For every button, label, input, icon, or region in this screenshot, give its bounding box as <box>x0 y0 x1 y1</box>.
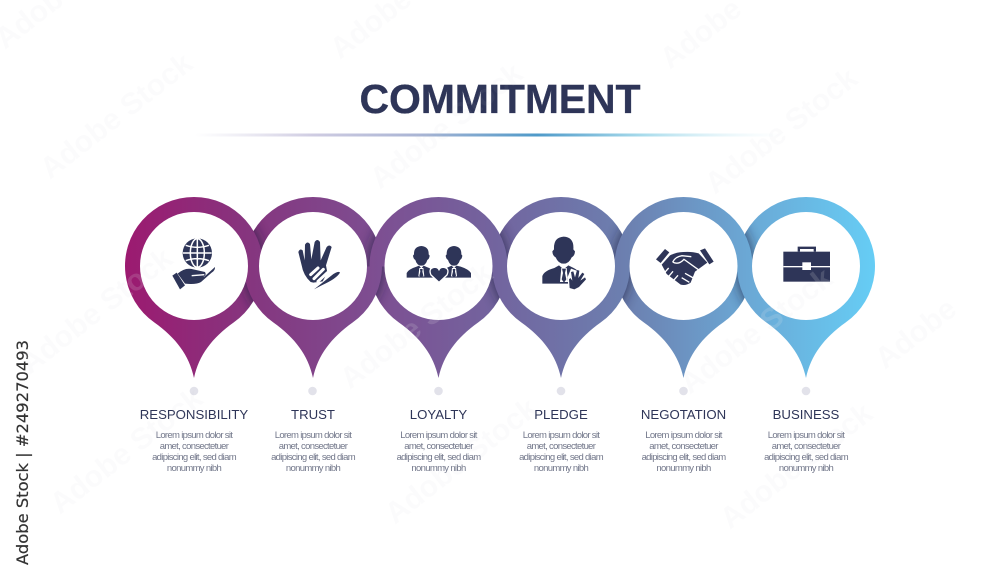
icon: two men and heart <box>407 246 471 282</box>
description: adipiscing elit, sed diam <box>519 452 604 463</box>
description: amet, consectetuer <box>160 441 229 452</box>
watermark: Adobe <box>869 292 963 376</box>
step 5: negotation <box>630 212 738 474</box>
description: amet, consectetuer <box>649 441 718 452</box>
label: LOYALTY <box>410 407 467 422</box>
watermark: Adobe Stock <box>674 261 839 401</box>
watermark: Adobe Stock <box>14 241 179 381</box>
description: nonummy nibh <box>656 463 711 474</box>
description: amet, consectetuer <box>772 441 841 452</box>
dot <box>679 387 688 395</box>
description: Lorem ipsum dolor sit <box>768 430 845 441</box>
dot <box>308 387 317 395</box>
watermark: Adobe Stock <box>334 256 499 396</box>
watermark: Adobe Stock <box>674 261 839 401</box>
description: nonummy nibh <box>286 463 340 474</box>
description: adipiscing elit, sed diam <box>397 452 481 463</box>
icon: man raising hand <box>542 237 587 291</box>
description: amet, consectetuer <box>404 441 473 452</box>
title: COMMITMENT <box>360 76 640 122</box>
label: RESPONSIBILITY <box>140 407 248 422</box>
description: nonummy nibh <box>534 463 588 474</box>
icon: briefcase <box>783 247 830 282</box>
description: Lorem ipsum dolor sit <box>275 430 352 441</box>
interlaced pin band <box>125 197 875 378</box>
description: adipiscing elit, sed diam <box>642 452 726 463</box>
watermark: Adobe Stock <box>14 241 179 381</box>
description: Lorem ipsum dolor sit <box>400 430 478 441</box>
description: adipiscing elit, sed diam <box>152 452 237 463</box>
dot <box>190 387 198 395</box>
step 3: loyalty <box>384 212 492 474</box>
label: NEGOTATION <box>641 407 726 422</box>
description: nonummy nibh <box>411 463 466 474</box>
stock id side text: Adobe Stock | #249270493 <box>13 340 32 565</box>
description: amet, consectetuer <box>279 441 348 452</box>
watermark: Adobe Stock <box>34 46 199 186</box>
step 1: responsibility <box>140 212 248 474</box>
description: Lorem ipsum dolor sit <box>156 430 233 441</box>
dot <box>802 387 810 395</box>
watermark: Adobe Stock <box>364 56 529 196</box>
step 2: trust <box>259 212 367 474</box>
watermark: Adobe Stock <box>44 381 209 521</box>
watermark: Adobe Stock <box>714 396 879 536</box>
description: nonummy nibh <box>779 463 833 474</box>
description: nonummy nibh <box>167 463 221 474</box>
description: Lorem ipsum dolor sit <box>645 430 723 441</box>
description: amet, consectetuer <box>527 441 596 452</box>
label: BUSINESS <box>773 407 840 422</box>
title underline <box>195 134 785 136</box>
watermark: Adobe Stock <box>699 61 864 201</box>
step 4: pledge <box>507 212 615 474</box>
step 6: business <box>752 212 860 474</box>
icon: globe in hand <box>172 238 215 289</box>
description: adipiscing elit, sed diam <box>764 452 849 463</box>
icon: adult and child hands <box>298 240 340 289</box>
watermark: Adobe Stock <box>379 391 544 531</box>
dot <box>557 387 565 395</box>
label: TRUST <box>291 407 335 422</box>
watermark: Adobe Stock <box>334 256 499 396</box>
dot <box>434 387 443 395</box>
description: Lorem ipsum dolor sit <box>523 430 600 441</box>
icon: handshake <box>656 248 714 285</box>
label: PLEDGE <box>534 407 588 422</box>
description: adipiscing elit, sed diam <box>271 452 356 463</box>
